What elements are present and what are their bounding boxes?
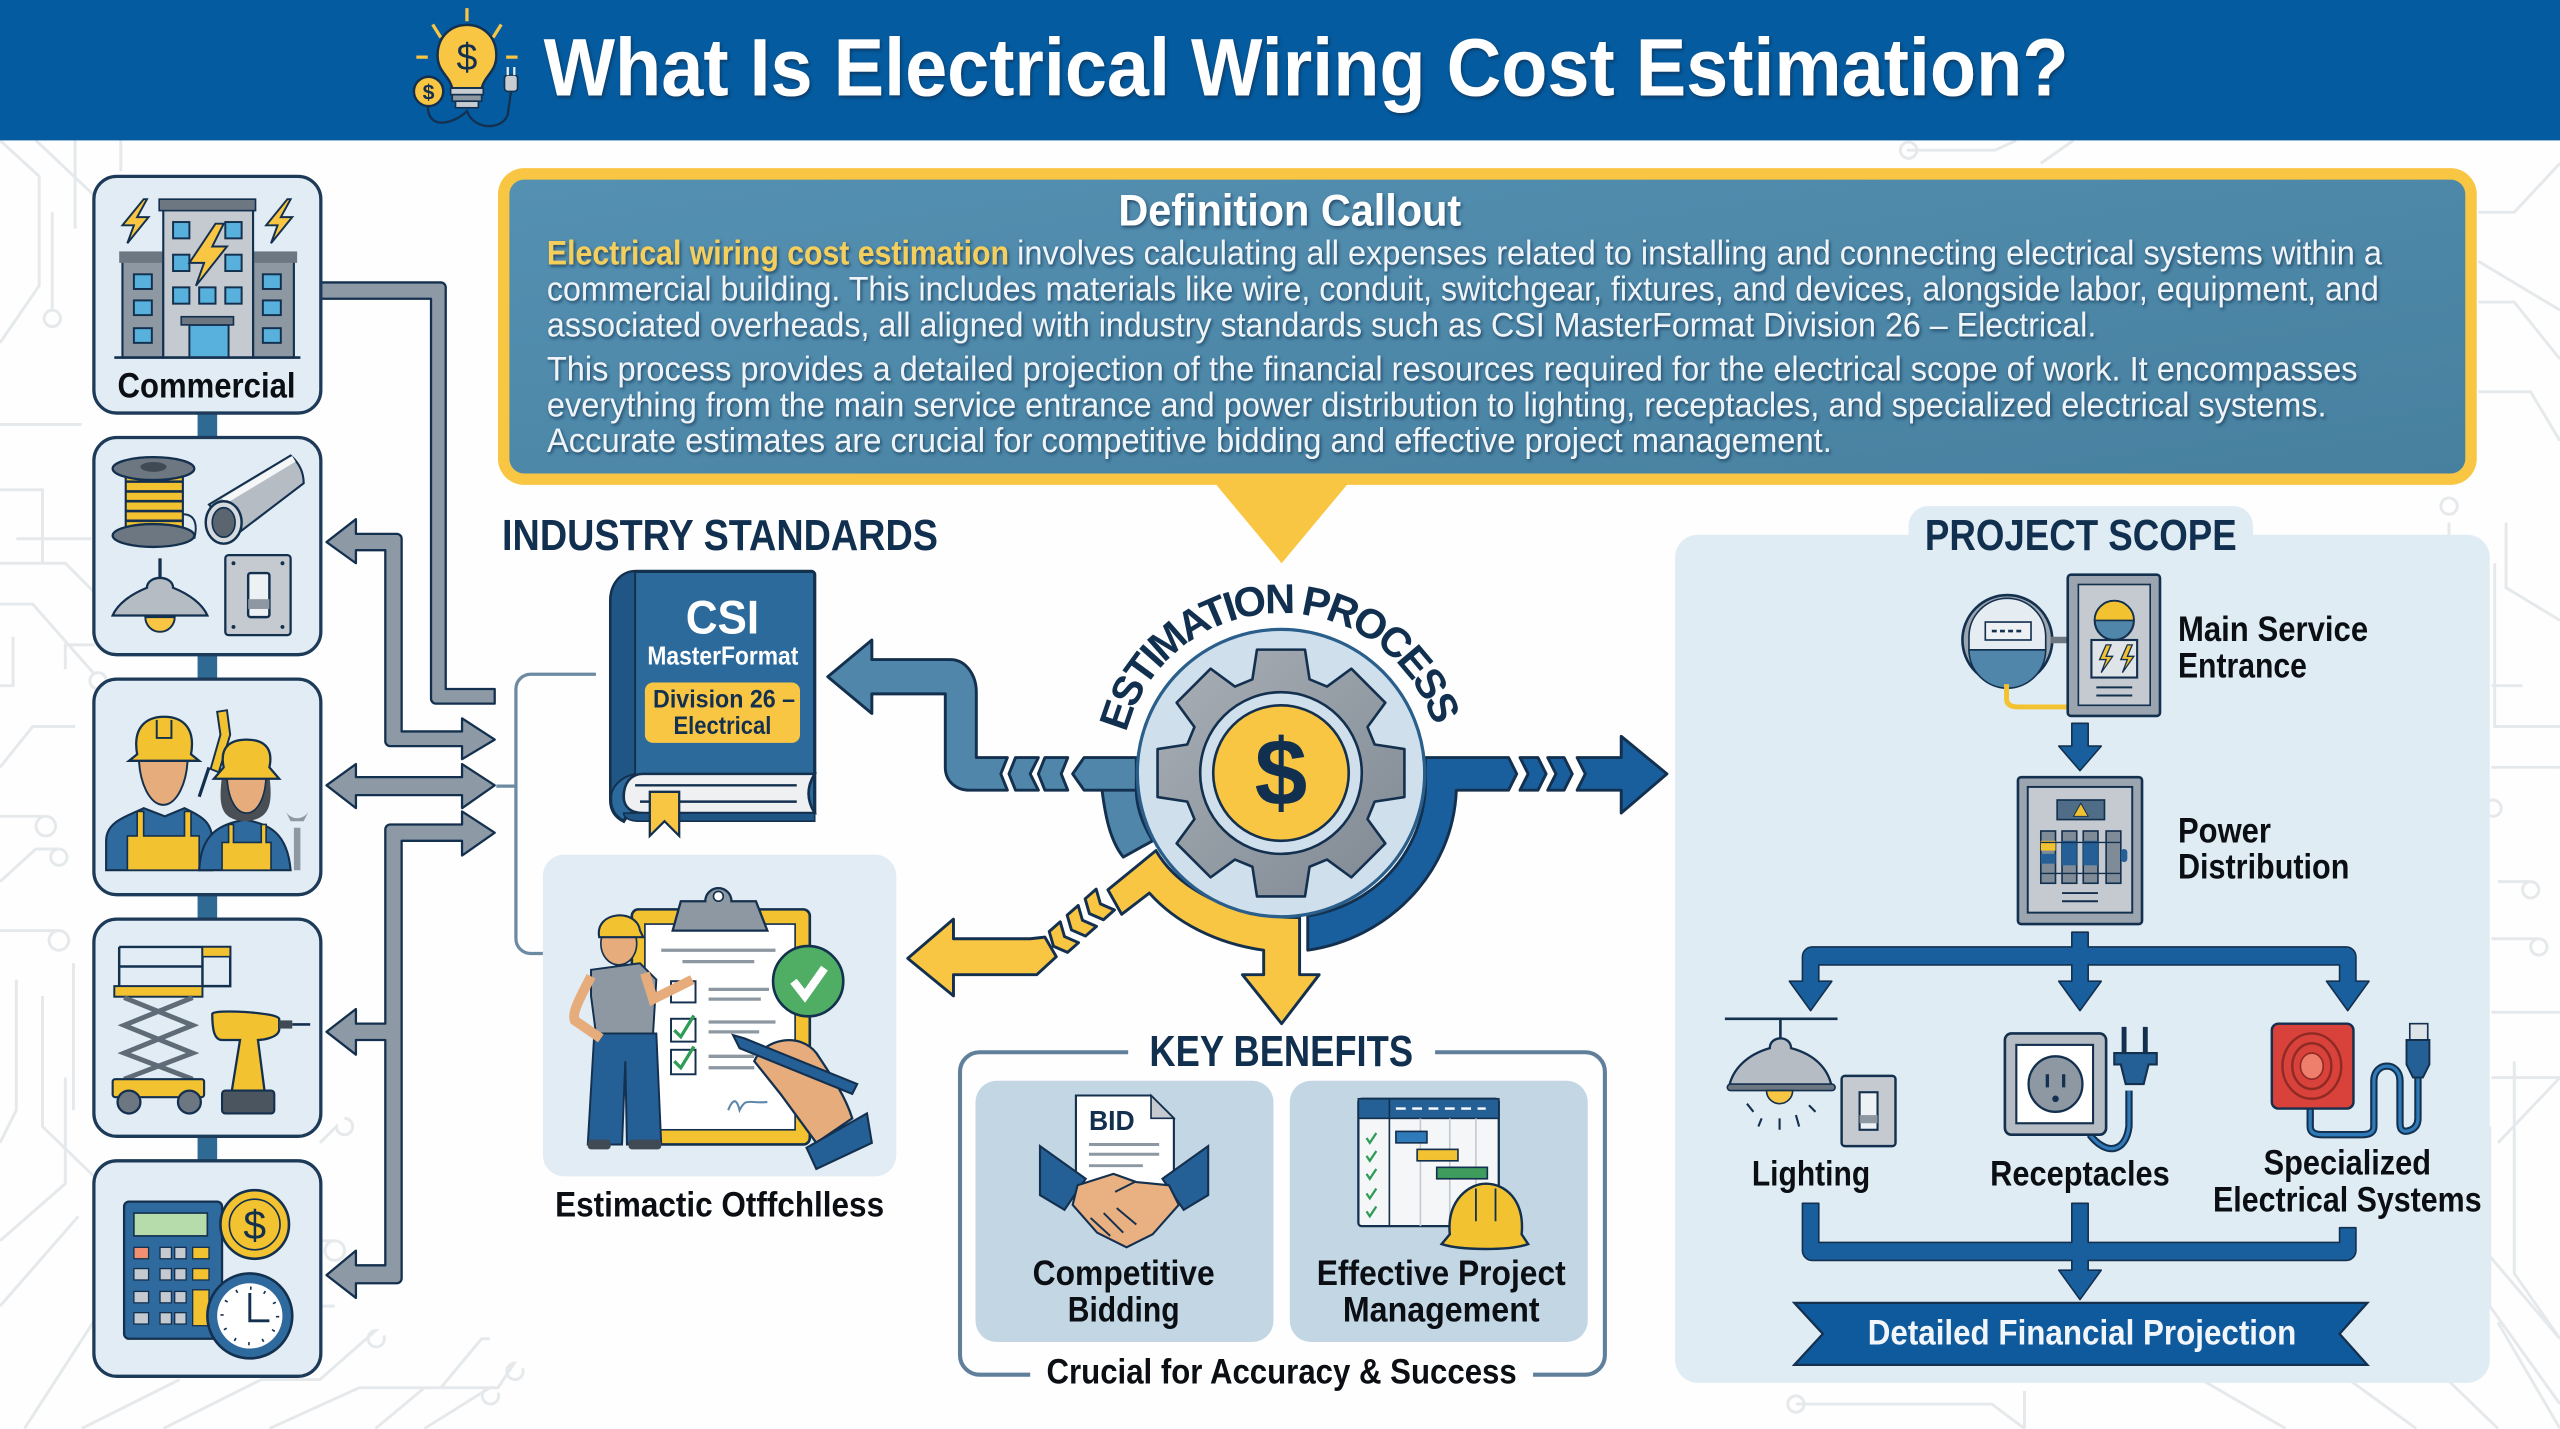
label: receptacles: Receptacles: [1990, 1154, 2170, 1193]
icon: bid document and handshake: [1040, 1096, 1208, 1247]
icon: screwdriver: [199, 710, 230, 797]
icon: office building: [114, 199, 300, 358]
label: commercial: Commercial: [118, 367, 296, 406]
icon: wire spool: [113, 457, 196, 547]
grey double arrow: labor link: [327, 764, 495, 808]
gear outer ring: [1137, 629, 1425, 917]
book title: CSI: [686, 591, 759, 644]
banner: detailed financial projection: [1794, 1303, 2367, 1365]
arrow: steel blue to standards: [828, 640, 1153, 857]
callout frame: [498, 168, 2477, 563]
card: effective project management: Management: [1343, 1291, 1540, 1330]
bookmark: [650, 792, 679, 836]
icon: power distribution panel: [2018, 777, 2142, 924]
panel: key benefits: [960, 1028, 1605, 1392]
grey arrow: equipment and overhead link: [327, 811, 495, 1298]
icon: wrench: [286, 811, 309, 870]
icon: CSI MasterFormat book: [611, 571, 815, 836]
icon: pendant lamp: [113, 558, 207, 632]
icon: main service entrance: [1962, 575, 2160, 716]
card: competitive bidding: [976, 1081, 1273, 1342]
estimation process gear: $: [1255, 720, 1307, 826]
icon: receptacle and plug: [2005, 1027, 2157, 1149]
icon: dollar coin: [220, 1190, 289, 1259]
arrow: meter to power: [2059, 723, 2101, 771]
panel: project scope: Distribution: [2178, 847, 2349, 886]
callout first paragraph: Electrical wiring cost estimation: [547, 234, 1009, 272]
icon: clock: [207, 1273, 292, 1358]
card: equipment: [94, 919, 321, 1136]
icon: scissor lift: [113, 947, 230, 1113]
icon: CSI MasterFormat book: Electrical: [673, 712, 771, 740]
card: commercial: [94, 176, 321, 413]
frame: [960, 1052, 1605, 1375]
panel: project scope: Electrical Systems: [2213, 1180, 2482, 1219]
heading: PROJECT SCOPE: [1925, 512, 2237, 560]
icon: dollar coin: $: [243, 1202, 266, 1248]
label: main service entrance: Main Service: [2178, 610, 2368, 649]
icon: bid document and handshake: BID: [1089, 1105, 1135, 1136]
bracket line: [496, 674, 596, 953]
callout first paragraph: involves calculating all expenses related to installing and connecting electrical systems within a: [1017, 234, 2383, 272]
callout second paragraph: This process provides a detailed projection of the financial resources required for the electrical scope of work. It encompasses: [547, 350, 2358, 388]
icon: CSI MasterFormat book: MasterFormat: [647, 640, 799, 670]
panel: project scope: [1675, 506, 2490, 1383]
icon: cordless drill: [212, 1012, 310, 1113]
footer text: Crucial for Accuracy & Success: [1047, 1353, 1517, 1392]
dollar coin: [1200, 692, 1362, 854]
callout first paragraph: [547, 234, 2383, 344]
label: effective project management: Effective Project: [1317, 1254, 1566, 1293]
label: power distribution: Power: [2178, 811, 2271, 850]
callout second paragraph: [547, 350, 2358, 460]
icon: male worker: [106, 717, 212, 870]
arrow: distribution tree: [1789, 932, 2369, 1011]
grey connector: commercial to standards: [320, 282, 495, 704]
label: competitive bidding: Competitive: [1033, 1254, 1215, 1293]
definition callout: [498, 168, 2477, 563]
label: lighting: Lighting: [1752, 1154, 1870, 1193]
callout heading: Definition Callout: [1118, 186, 1462, 235]
scope background: [1675, 506, 2490, 1383]
card: labor: [94, 679, 321, 895]
header icon: light bulb with dollar sign: [414, 8, 518, 126]
estimation process gear: [1137, 629, 1425, 917]
label: specialized electrical systems: Specialized: [2264, 1144, 2431, 1183]
arrow: converging to projection: [1802, 1203, 2356, 1300]
callout first paragraph: associated overheads, all aligned with industry standards such as CSI MasterFormat Division 26 – Electrical.: [547, 306, 2096, 344]
grey arrow: materials link: [327, 519, 495, 759]
callout first paragraph: commercial building. This includes materials like wire, conduit, switchgear, fixtures, and devices, alongside labor, equipment, and: [547, 270, 2379, 308]
callout second paragraph: everything from the main service entrance and power distribution to lighting, receptacles, and specialized electrical systems.: [547, 386, 2327, 424]
icon: calculator: [124, 1202, 222, 1339]
card: materials: [94, 438, 321, 655]
title: What Is Electrical Wiring Cost Estimation?: [544, 23, 2069, 114]
icon: specialized electrical system: [2272, 1024, 2429, 1135]
heading: industry standards: INDUSTRY STANDARDS: [502, 512, 938, 560]
arrow: blue to project scope: [1308, 736, 1667, 950]
callout panel: [509, 180, 2465, 473]
header icon: light bulb with dollar sign: $: [457, 36, 478, 78]
card: effective project management: [1290, 1081, 1588, 1342]
callout second paragraph: Accurate estimates are crucial for competitive bidding and effective project management.: [547, 422, 1832, 460]
left column connectors: [198, 411, 217, 1162]
icon: CSI MasterFormat book: Division 26 –: [653, 686, 795, 714]
icon: worker with hard hat: [574, 915, 692, 1149]
gear body: [1158, 650, 1404, 896]
card: competitive bidding: Bidding: [1068, 1291, 1180, 1330]
card: overheads: [94, 1161, 321, 1376]
panel: estimation checklist: [543, 855, 896, 1176]
label: estimation process arc: ESTIMATION PROCESS: [1100, 584, 1458, 730]
panel: project scope: Entrance: [2178, 647, 2307, 686]
icon: female worker: [199, 740, 291, 870]
icon: gantt chart and hard hat: [1358, 1099, 1528, 1249]
banner: detailed financial projection: Detailed Financial Projection: [1868, 1313, 2296, 1352]
icon: lighting lamp and switch: [1725, 1019, 1896, 1146]
icon: green check badge: [773, 946, 843, 1016]
label: estimation checklist: Estimactic Otffchlless: [555, 1185, 884, 1224]
division badge: [645, 682, 800, 743]
header icon: light bulb with dollar sign: $: [423, 82, 435, 105]
icon: conduit pipe: [206, 456, 304, 544]
arrow: yellow to checklist: [908, 851, 1319, 1024]
icon: wall switch: [225, 555, 291, 635]
header bar: [0, 0, 2560, 140]
heading: KEY BENEFITS: [1149, 1028, 1413, 1076]
icon: writing hand with pen: [733, 1035, 872, 1169]
icon: clipboard: [632, 888, 810, 1144]
